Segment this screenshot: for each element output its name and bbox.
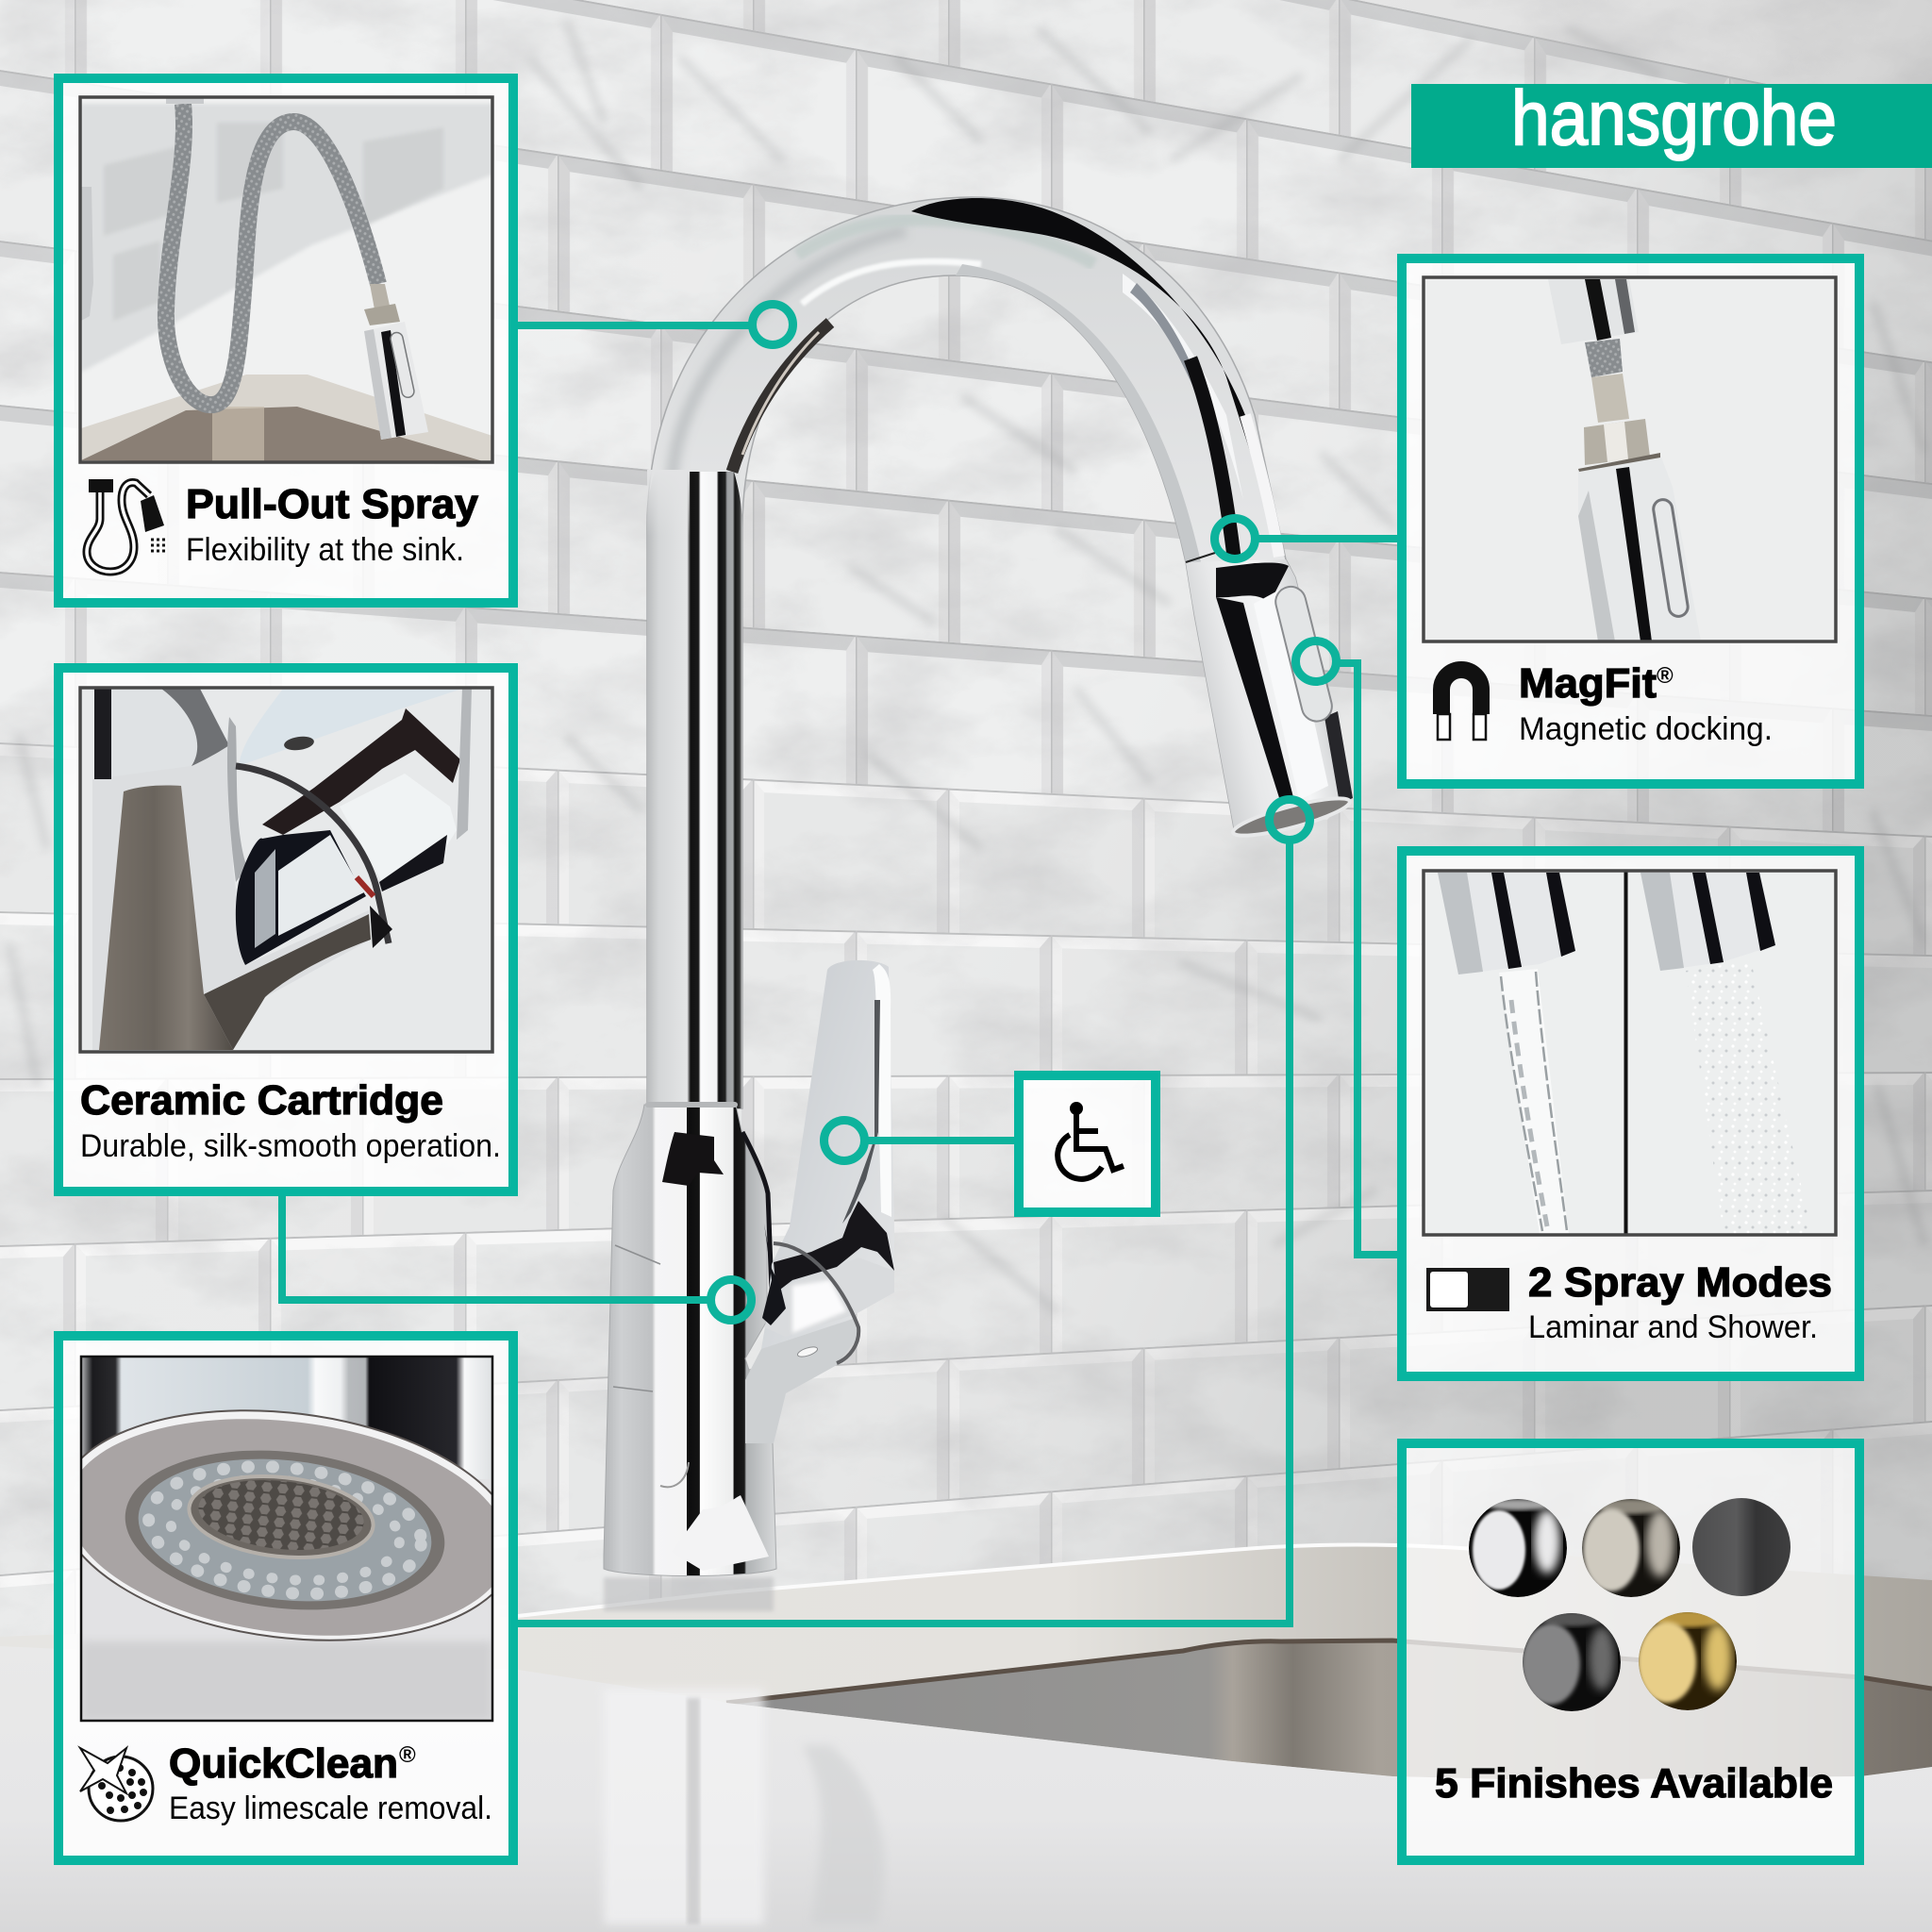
registered mark: ® — [1657, 663, 1674, 689]
faucet pull-down spray head — [1186, 553, 1353, 842]
logo banner — [1411, 75, 1932, 168]
icon: quickclean nozzle — [80, 1748, 153, 1821]
panel: quickclean — [46, 1336, 529, 1860]
faucet base column — [604, 1102, 776, 1576]
photo frame — [81, 1357, 492, 1721]
photo: hose and spray head — [80, 97, 492, 464]
counter and sink — [0, 1545, 1932, 1932]
heading: QuickClean — [169, 1740, 398, 1787]
heading: 5 Finishes Available — [1435, 1760, 1833, 1807]
heading: 2 Spray Modes — [1528, 1259, 1832, 1306]
heading: Pull-Out Spray — [186, 481, 479, 527]
connector: spray modes — [1296, 641, 1397, 1255]
panel: ceramic cartridge — [58, 668, 513, 1191]
photo: magnetic docking — [1424, 277, 1836, 641]
logo banner: hansgrohe — [1511, 75, 1837, 161]
finish swatch: matte black — [1692, 1498, 1790, 1596]
icon: pull-out hose — [87, 479, 165, 572]
photo frame — [80, 97, 492, 462]
connector: quickclean — [518, 800, 1309, 1624]
heading: MagFit — [1519, 660, 1657, 707]
finish swatch: brushed nickel — [1582, 1499, 1680, 1597]
description: Laminar and Shower. — [1528, 1309, 1818, 1345]
icon: mode toggle — [1426, 1268, 1509, 1311]
connector: accessibility — [824, 1121, 1014, 1160]
connector: magfit — [1215, 519, 1397, 558]
finish swatch: gold — [1638, 1610, 1737, 1710]
faucet vertical tube — [647, 470, 742, 1108]
connector: pull-out spray — [518, 304, 792, 345]
photo: aerator close-up — [82, 1357, 491, 1720]
photo frame — [1424, 277, 1836, 641]
heading: Ceramic Cartridge — [80, 1077, 443, 1124]
panel: spray modes — [1402, 851, 1859, 1376]
panel: finishes — [1402, 1443, 1859, 1860]
panel: magfit — [1402, 258, 1859, 784]
photo frame — [1424, 871, 1836, 1235]
photo: lever close-up — [80, 688, 492, 1052]
photo frame — [80, 688, 492, 1052]
icon: magnet — [1438, 670, 1486, 740]
faucet spout arc — [647, 197, 1351, 1108]
faucet — [604, 197, 1353, 1576]
registered mark: ® — [399, 1742, 416, 1768]
description: Flexibility at the sink. — [186, 532, 464, 568]
connector: ceramic cartridge — [282, 1196, 751, 1321]
description: Durable, silk-smooth operation. — [80, 1128, 501, 1164]
panel: pull-out spray — [58, 78, 513, 603]
photo: laminar and shower streams — [1424, 871, 1836, 1235]
description: Easy limescale removal. — [169, 1790, 492, 1826]
faucet lever handle — [745, 960, 894, 1443]
icon: wheelchair — [1058, 1102, 1124, 1179]
finish swatch: chrome — [1469, 1499, 1567, 1597]
description: Magnetic docking. — [1519, 711, 1773, 747]
finish swatch: brushed black chrome — [1522, 1611, 1621, 1711]
panel: accessibility icon — [1019, 1075, 1156, 1212]
